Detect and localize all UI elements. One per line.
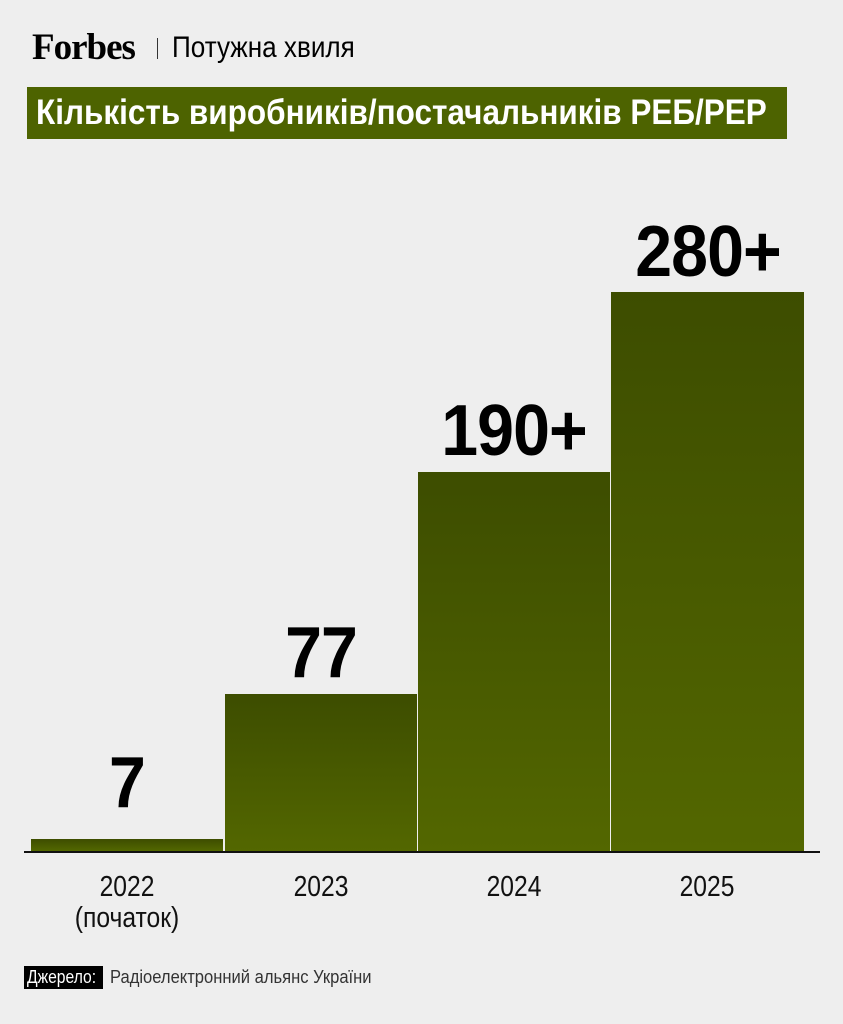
bar 2022 (31, 839, 223, 851)
x labels: 2025 (680, 871, 734, 903)
source: Джерело: (27, 967, 96, 987)
logo: Forbes (32, 27, 135, 68)
x labels: 2022 (100, 871, 154, 903)
bar 2024 (418, 472, 610, 851)
source: Радіоелектронний альянс України (110, 967, 372, 987)
section name: Потужна хвиля (172, 31, 355, 64)
bar 2023 (225, 694, 417, 851)
x labels: 2023 (294, 871, 348, 903)
source (24, 966, 372, 989)
x labels: (початок) (75, 902, 179, 934)
x labels: 2024 (487, 871, 541, 903)
value 2025: 280+ (635, 212, 781, 292)
header: Forbes logo and section (32, 27, 355, 68)
value 2024: 190+ (441, 391, 587, 471)
title: Кількість виробників/постачальників РЕБ/РЕР (36, 93, 767, 132)
value 2022: 7 (109, 743, 145, 823)
bar 2025 (611, 292, 804, 851)
value 2023: 77 (285, 613, 357, 693)
bar chart (24, 212, 820, 853)
x labels (75, 871, 734, 934)
